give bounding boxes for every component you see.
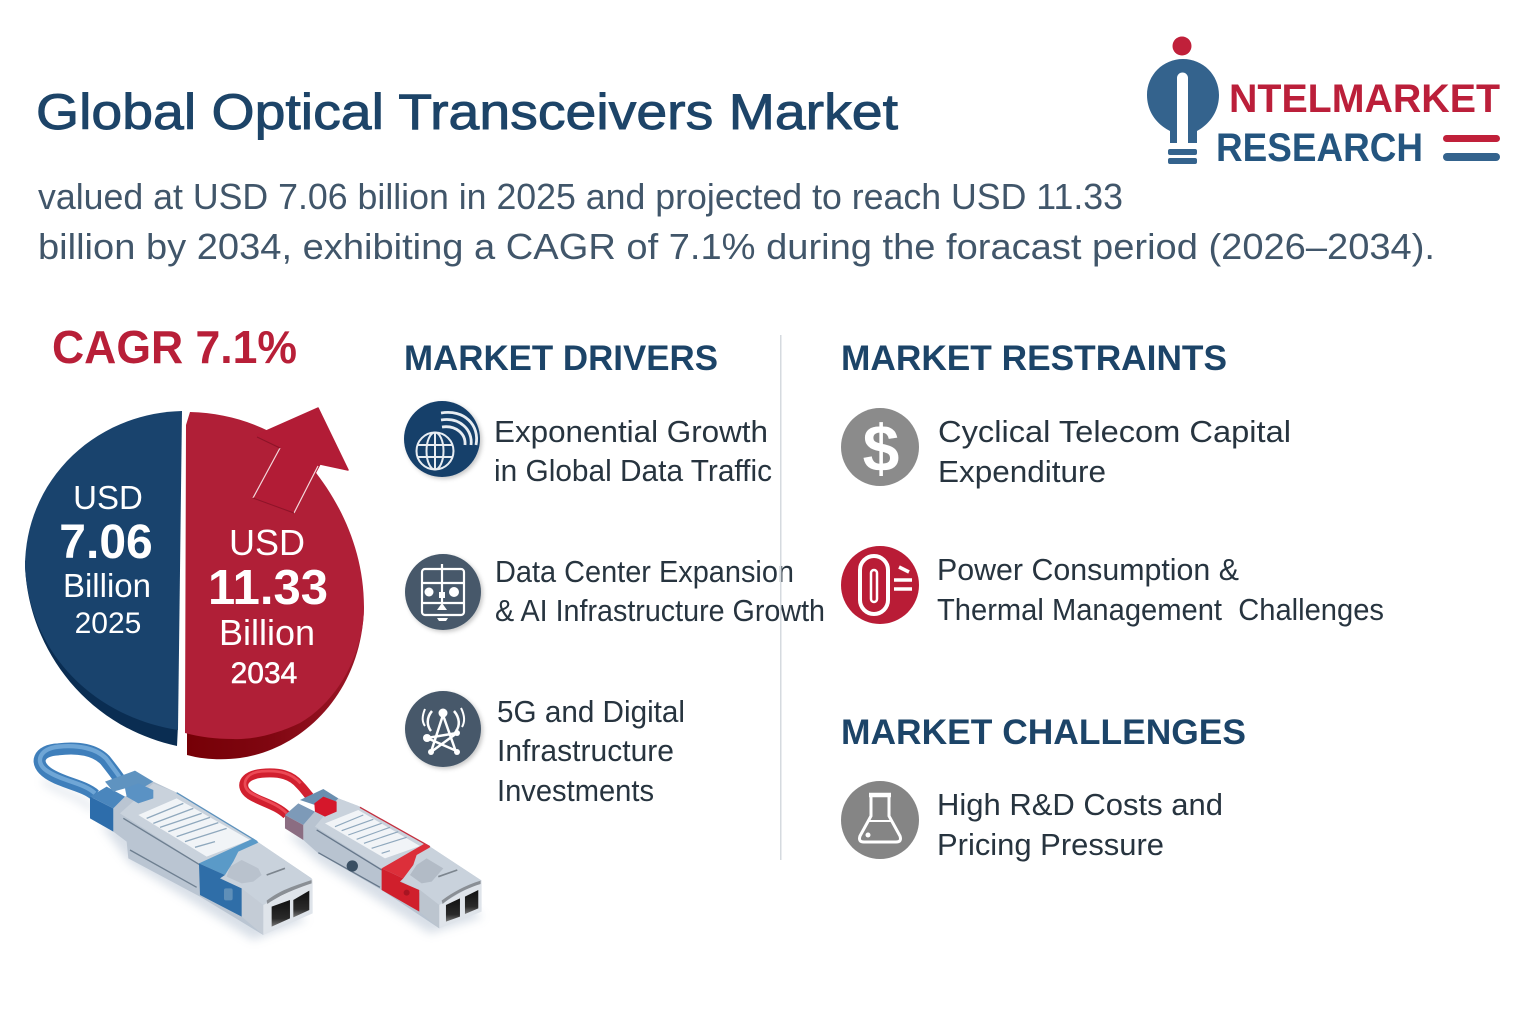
icon: 5G tower — [405, 691, 481, 767]
heading: market drivers: MARKET DRIVERS — [404, 339, 718, 378]
panel: market challenges — [841, 713, 1246, 862]
text: exponential growth — [494, 414, 772, 488]
text: 5G and digital infrastructure: Infrastructure — [497, 733, 674, 768]
subtitle: billion by 2034, exhibiting a CAGR of 7.1% during the foracast period (2026–2034). — [38, 226, 1435, 267]
text: high R&D costs: High R&D Costs and — [937, 787, 1223, 822]
text: 5G and digital infrastructure: Investments — [497, 773, 654, 808]
text: data center expansion — [495, 554, 825, 628]
logo: Intelmarket Research: RESEARCH — [1216, 126, 1423, 170]
subtitle — [38, 176, 1435, 267]
pie slice: 2034 — [185, 412, 364, 759]
text: power consumption — [937, 552, 1384, 627]
text: data center expansion: Data Center Expansion — [495, 554, 794, 589]
heading: market restraints: MARKET RESTRAINTS — [841, 339, 1227, 378]
text: cyclical telecom capital expenditure: Cyclical Telecom Capital — [938, 414, 1291, 449]
icon: dollar: $ — [863, 411, 899, 485]
pie slice: 2025: 2025 — [75, 607, 141, 640]
logo: Intelmarket Research — [1147, 36, 1500, 170]
logo: Intelmarket Research: NTELMARKET — [1229, 77, 1500, 121]
arrow: growth — [253, 408, 348, 513]
text: cyclical telecom capital expenditure — [938, 414, 1291, 489]
pie chart: market size 2025 vs 2034 — [25, 408, 364, 759]
divider — [780, 335, 782, 860]
text: exponential growth: Exponential Growth — [494, 414, 768, 449]
text: data center expansion: & AI Infrastructure Growth — [495, 593, 825, 628]
text: exponential growth: in Global Data Traffic — [494, 453, 772, 488]
icon: power and thermal — [841, 546, 919, 624]
panel: market drivers — [404, 339, 825, 808]
text: power consumption: Thermal Management Challenges — [937, 592, 1384, 627]
pie labels: 2034: USD — [229, 522, 305, 563]
pie labels: 2034: 11.33 — [208, 561, 328, 615]
pie slice: 2025 — [25, 411, 182, 746]
illustration: blue optical transceiver — [40, 746, 313, 940]
pie slice: 2025: USD — [73, 479, 143, 516]
pie labels: 2034: 2034 — [231, 657, 297, 690]
text: high R&D costs — [937, 787, 1223, 862]
icon: data center — [405, 554, 481, 630]
pie labels: 2034 — [208, 522, 328, 690]
text: cyclical telecom capital expenditure: Expenditure — [938, 454, 1106, 489]
pie labels: 2034: Billion — [219, 612, 315, 653]
text: power consumption: Power Consumption & — [937, 552, 1239, 587]
panel: market restraints — [841, 339, 1384, 627]
CAGR heading: CAGR 7.1% — [52, 321, 297, 373]
pie slice: 2025: Billion — [63, 567, 151, 604]
text: high R&D costs: Pricing Pressure — [937, 827, 1164, 862]
title: Global Optical Transceivers Market — [36, 84, 898, 140]
illustration: red optical transceiver — [244, 771, 483, 933]
text: 5G and digital infrastructure — [497, 694, 685, 808]
subtitle: valued at USD 7.06 billion in 2025 and projected to reach USD 11.33 — [38, 176, 1123, 217]
text: 5G and digital infrastructure: 5G and Digital — [497, 694, 685, 729]
pie slice: 2025: 7.06 — [59, 516, 153, 569]
icon: dollar — [841, 408, 919, 486]
heading: market challenges: MARKET CHALLENGES — [841, 713, 1246, 752]
icon: flask — [841, 781, 919, 859]
icon: globe with signal — [404, 401, 480, 477]
